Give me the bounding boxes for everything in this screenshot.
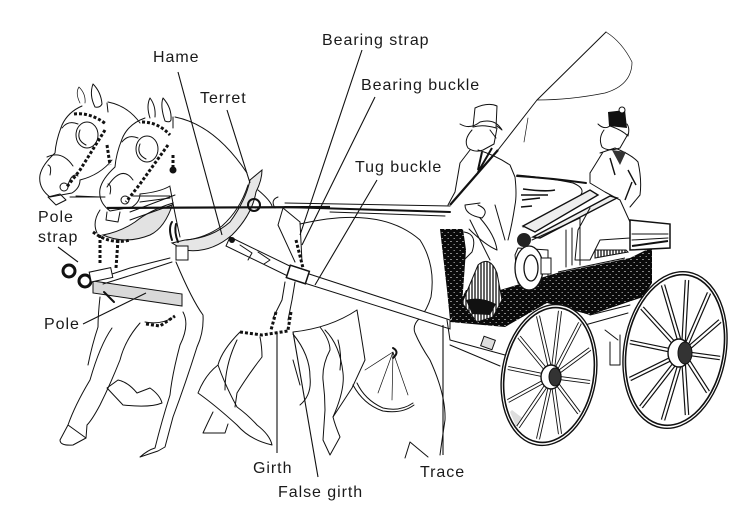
label: Pole strap: Pole	[38, 209, 74, 226]
far horse	[40, 84, 175, 445]
far horse head	[40, 84, 140, 205]
whip	[450, 32, 632, 205]
front wheel hub	[541, 365, 561, 389]
label: Bearing strap: Bearing strap	[322, 32, 430, 49]
rear wheel	[611, 263, 739, 437]
carriage body	[440, 229, 652, 366]
label: Terret: Terret	[200, 90, 247, 107]
near horse neck and body outline	[170, 117, 432, 332]
far horse collar	[93, 195, 175, 241]
label: False girth: False girth	[278, 484, 363, 501]
reins	[107, 197, 450, 216]
label: Trace: Trace	[420, 464, 465, 481]
pole	[63, 235, 182, 306]
driver	[448, 104, 516, 322]
near horse collar and hame	[170, 170, 262, 260]
label: Tug buckle: Tug buckle	[355, 159, 442, 176]
lantern	[515, 233, 551, 290]
label: Pole: Pole	[44, 316, 80, 333]
near horse	[100, 98, 445, 458]
label: Girth: Girth	[253, 460, 292, 477]
passenger	[575, 107, 641, 260]
carriage seat and dash	[517, 175, 670, 272]
near horse legs	[140, 262, 445, 458]
rear wheel hub	[668, 339, 692, 367]
rear horse-hidden wheel	[353, 348, 414, 412]
far horse legs	[60, 297, 175, 445]
label: Hame: Hame	[153, 49, 199, 66]
front wheel	[490, 297, 608, 453]
label: Bearing buckle: Bearing buckle	[361, 77, 480, 94]
hame tug and trace	[226, 208, 450, 335]
leader lines	[58, 50, 443, 477]
label: Pole strap: strap	[38, 229, 78, 246]
near horse head	[100, 98, 176, 222]
